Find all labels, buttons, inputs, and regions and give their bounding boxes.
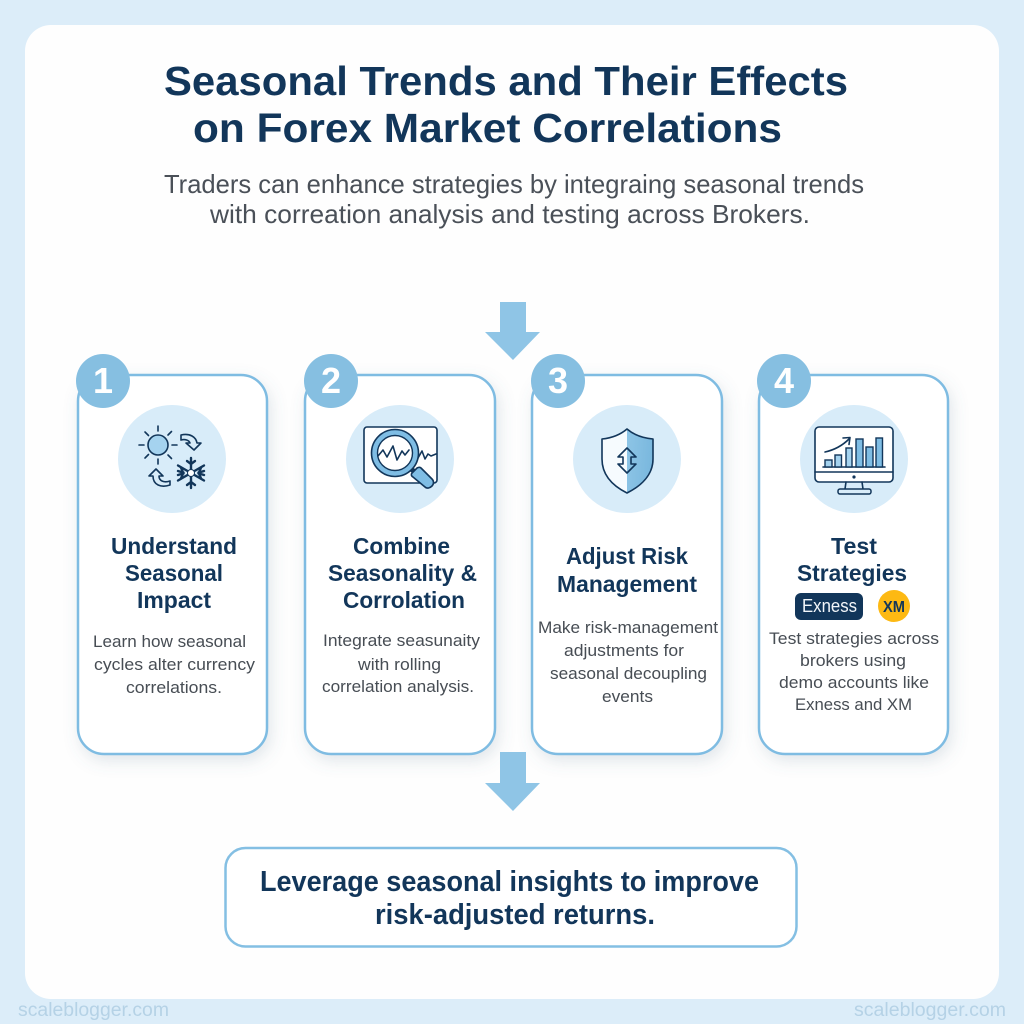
- card 4 text: brokers using: [800, 651, 906, 670]
- card 3: adjust risk management: [531, 354, 722, 754]
- logo: XM: XM: [883, 599, 905, 616]
- number badge 1: [76, 354, 130, 408]
- card 3 heading: Adjust Risk: [566, 543, 688, 569]
- card frame: [759, 375, 948, 754]
- subtitle: with correation analysis and testing across Brokers.: [209, 199, 810, 229]
- icon: shield: [573, 405, 681, 513]
- card 4 text: [769, 629, 939, 714]
- card 3 text: adjustments for: [564, 641, 684, 660]
- card 1 text: [93, 632, 256, 697]
- card 3 text: [538, 618, 718, 706]
- card 3 heading: [557, 543, 697, 597]
- card 4 heading: [797, 533, 907, 586]
- card 2 text: with rolling: [357, 655, 441, 674]
- card frame: [305, 375, 495, 754]
- number badge 2: 2: [321, 360, 341, 401]
- arrow: down to conclusion: [485, 752, 540, 811]
- card 1 text: cycles alter currency: [94, 655, 256, 674]
- card 4 heading: Test: [831, 533, 877, 559]
- icon: magnifier over chart: [346, 405, 454, 513]
- card 3 heading: Management: [557, 571, 697, 597]
- arrow: down to steps: [485, 302, 540, 360]
- card 3 text: events: [602, 687, 653, 706]
- card 1 heading: Understand: [111, 533, 237, 559]
- card 3 text: Make risk-management: [538, 618, 718, 637]
- logo: Exness: [795, 593, 863, 620]
- card 2 heading: Corrolation: [343, 587, 465, 613]
- card 1 text: Learn how seasonal: [93, 632, 246, 651]
- logo: Exness: Exness: [802, 596, 857, 616]
- card 4: test strategies: [757, 354, 948, 754]
- conclusion box: [226, 848, 796, 946]
- card 2 heading: Seasonality &: [328, 560, 477, 586]
- number badge 3: [531, 354, 585, 408]
- icon: seasons cycle: [118, 405, 226, 513]
- card 1 heading: Seasonal: [125, 560, 223, 586]
- card frame: [532, 375, 722, 754]
- number badge 1: 1: [93, 360, 113, 401]
- watermark right: scaleblogger.com: [854, 1000, 1006, 1021]
- watermark left: scaleblogger.com: [18, 1000, 169, 1021]
- number badge 4: [757, 354, 811, 408]
- icon: monitor with chart: [800, 405, 908, 513]
- card 1 heading: Impact: [137, 587, 211, 613]
- card 1 text: correlations.: [126, 678, 222, 697]
- title: Seasonal Trends and Their Effects: [164, 58, 848, 104]
- number badge 2: [304, 354, 358, 408]
- number badge 4: 4: [774, 360, 794, 401]
- card frame: [78, 375, 267, 754]
- title: on Forex Market Correlations: [193, 105, 782, 151]
- card 2: combine seasonality and correlation: [304, 354, 495, 754]
- card 4 heading: Strategies: [797, 560, 907, 586]
- card 3 text: seasonal decoupling: [550, 664, 707, 683]
- number badge 3: 3: [548, 360, 568, 401]
- card 4 text: Test strategies across: [769, 629, 939, 648]
- card 2 text: Integrate seasunaity: [323, 631, 481, 650]
- logo: XM: [878, 590, 910, 622]
- subtitle: [164, 169, 864, 229]
- card 2 text: correlation analysis.: [322, 677, 474, 696]
- card 1 heading: [111, 533, 237, 613]
- conclusion box: Leverage seasonal insights to improve: [260, 866, 759, 898]
- card 4 text: demo accounts like: [779, 673, 929, 692]
- card 2 heading: [328, 533, 477, 613]
- subtitle: Traders can enhance strategies by integraing seasonal trends: [164, 169, 864, 199]
- card 1: understand seasonal impact: [76, 354, 267, 754]
- conclusion box: risk-adjusted returns.: [375, 899, 655, 931]
- card 2 text: [322, 631, 481, 696]
- card 4 text: Exness and XM: [795, 695, 912, 714]
- card 2 heading: Combine: [353, 533, 450, 559]
- title: [164, 58, 848, 151]
